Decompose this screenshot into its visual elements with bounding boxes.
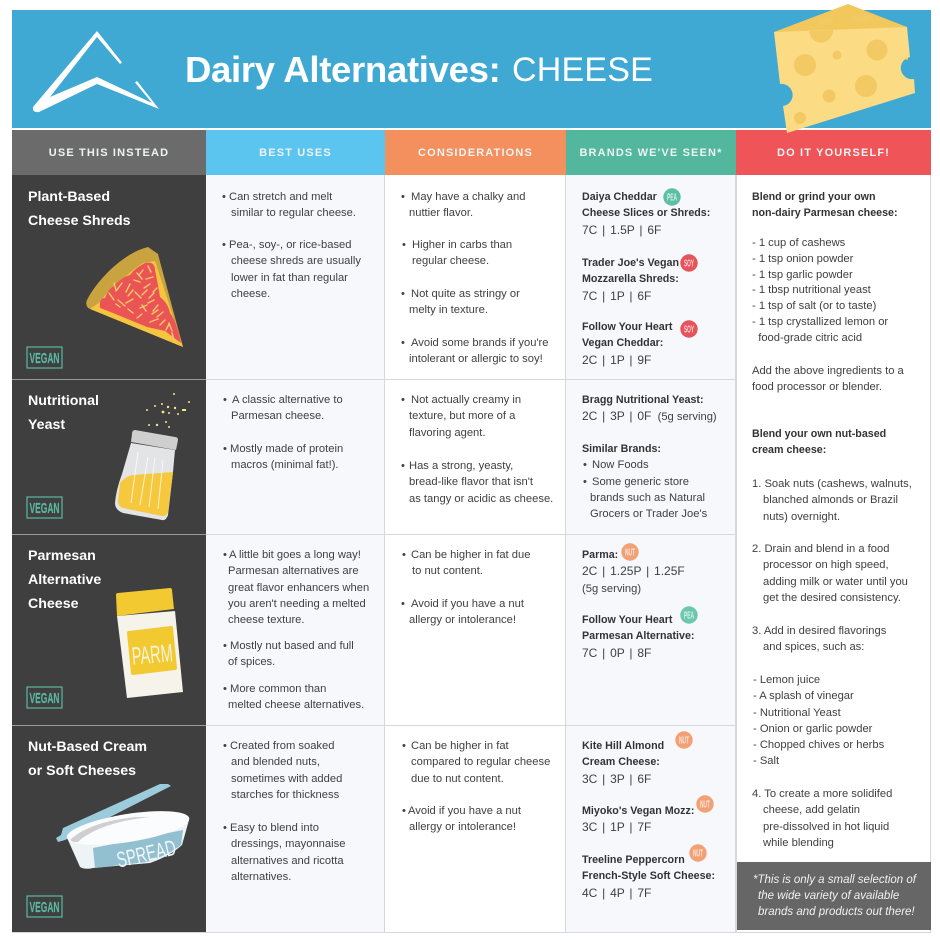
bullet text: due to nut content. [411,773,504,785]
bullet text: cheese shreds are usually [231,255,361,267]
best uses: parmesan: • [223,683,227,695]
badge: nut [696,795,714,813]
brand: miyoko's: 3C | 1P | 7F [582,820,651,834]
bullet text [231,820,345,885]
flavoring list: - Lemon juice [753,674,820,686]
heading: parmesan [28,548,101,612]
badge: nut [621,543,639,561]
brand: kite hill: Cream Cheese: [582,756,660,768]
column header: best uses [206,130,385,175]
brand: parma: 2C | 1.25P | 1.25F [582,564,685,578]
parmesan recipe heading: non-dairy Parmesan cheese: [752,207,898,219]
flavoring list: - Salt [753,755,779,767]
brand: follow your heart: 2C | 1P | 9F [582,353,651,367]
bullet text: melty in texture. [409,304,488,316]
bullet text: Can be higher in fat [411,740,509,752]
bullet text: alternatives. [231,871,291,883]
bullet text: Pea-, soy-, or rice-based [229,239,352,251]
brand: daiya [582,191,710,237]
bullet text: Easy to blend into [230,822,319,834]
heading: plant-based: Cheese Shreds [28,213,131,229]
column header: brands: BRANDS WE'VE SEEN* [579,147,723,159]
bullet text: melted cheese alternatives. [228,699,364,711]
flavoring list [753,672,884,770]
heading: nut-based: Nut-Based Cream [28,739,147,755]
bullet text: Avoid if you have a nut [411,598,524,610]
heading: plant-based: Plant-Based [28,189,110,205]
row: nut-based cream or soft cheeses [12,726,206,933]
bullet text: compared to regular cheese [411,756,550,768]
brand: treeline: 4C | 4P | 7F [582,886,651,900]
vegan badge [26,686,63,709]
brand: follow your heart parmesan: Parmesan Alternative: [582,630,694,642]
parmesan ingredients [752,236,888,347]
brand: daiya: Daiya Cheddar [582,191,657,203]
bullet text: dressings, mayonnaise [231,838,345,850]
brand: parma [582,549,685,595]
title: Dairy Alternatives: [185,49,500,90]
bullet text [401,337,548,365]
step 1 [763,476,912,525]
bullet text: macros (minimal fat!). [231,459,339,471]
brand: parma: Parma: [582,549,618,561]
parmesan ingredients: - 1 tsp crystallized lemon or [752,316,888,328]
step 4: cheese, add gelatin [763,804,860,816]
badge: pea [663,188,681,206]
similar brands list: Now Foods [592,459,649,471]
similar brands list: • [583,476,587,488]
bullet text: Has a strong, yeasty, [409,460,513,472]
parmesan ingredients: food-grade citric acid [758,332,862,344]
icon: parm shaker [116,588,183,698]
heading: parmesan: Parmesan [28,548,96,564]
brands: parmesan [566,535,736,726]
bullet text: Higher in carbs than [412,239,512,251]
brand: follow your heart [582,321,672,367]
bullet text: May have a chalky and [411,191,525,203]
title [185,49,653,90]
bullet text [231,738,342,803]
bullet text [222,239,361,300]
considerations: shreds: • [401,191,405,203]
step 2: processor on high speed, [763,559,889,571]
badge: soy [680,320,698,338]
bullet text: Not actually creamy in [411,394,521,406]
flavoring list: - Onion or garlic powder [753,723,872,735]
bullet text: Parmesan alternatives are [228,565,359,577]
row: nutritional yeast [12,380,206,535]
bullet text [401,598,524,626]
brand: kite hill: Kite Hill Almond [582,740,664,752]
considerations: yeast [385,380,566,535]
bullet text: nuttier flavor. [409,207,473,219]
bullet text: texture, but more of a [409,410,515,422]
brand: bragg: 2C | 3P | 0F (5g serving) [582,409,717,423]
brand: follow your heart: Follow Your Heart [582,321,672,333]
parmesan recipe heading: Blend or grind your own [752,191,876,203]
brand: miyoko's: Miyoko's Vegan Mozz: [582,805,694,817]
similar brands list: Some generic store [592,476,689,488]
parmesan ingredients: - 1 tsp onion powder [752,253,853,265]
bullet text [223,640,354,668]
brand: treeline: French-Style Soft Cheese: [582,870,715,882]
step 4: 4. To create a more solidifed [752,788,892,800]
bullet text: Created from soaked [230,740,334,752]
bullet text: alternatives and ricotta [231,855,344,867]
step 2 [763,541,908,606]
footnote [737,862,931,930]
step 2: 2. Drain and blend in a food [752,543,889,555]
vegan badge [26,895,63,918]
bullet text: allergy or intolerance! [409,821,516,833]
best uses: shreds [206,175,385,380]
icon: cheese wedge [774,4,915,133]
bullet text: flavoring agent. [409,427,486,439]
bullet text: sometimes with added [231,773,342,785]
flavoring list: - A splash of vinegar [753,690,854,702]
bullet text: and blended nuts, [231,756,320,768]
bullet text: you aren't needing a melted [228,598,366,610]
parmesan method [752,363,904,396]
bullet text: Can be higher in fat due [411,549,530,561]
bullet text [223,394,343,422]
footnote: *This is only a small selection of [753,874,916,886]
considerations: shreds [385,175,566,380]
bullet text: A classic alternative to [232,394,343,406]
badge: nut [675,731,693,749]
heading: parmesan: Cheese [28,596,78,612]
heading: nutritional yeast: Nutritional [28,393,99,409]
bullet text [401,288,520,316]
considerations: shreds: • [401,337,405,349]
parmesan method: food processor or blender. [752,381,882,393]
flavoring list: - Chopped chives or herbs [753,739,884,751]
brand: bragg [582,394,717,423]
bullet text: regular cheese. [412,255,489,267]
column header: use this instead: USE THIS INSTEAD [49,147,169,159]
brand: follow your heart parmesan: Follow Your Heart [582,614,672,626]
best uses: yeast [206,380,385,535]
brand: daiya: Cheese Slices or Shreds: [582,207,710,219]
column header: do it yourself: DO IT YOURSELF! [777,147,890,159]
brand: bragg: Bragg Nutritional Yeast: [582,394,704,406]
brand: follow your heart: Vegan Cheddar: [582,337,663,349]
best uses: nut-based: • [223,822,227,834]
bullet text [409,803,521,836]
similar brands list: Grocers or Trader Joe's [590,508,707,520]
best uses: nut-based [206,726,385,933]
brand: follow your heart parmesan [582,614,694,660]
step 1: nuts) overnight. [763,511,840,523]
brand: trader joe's: 7C | 1P | 6F [582,289,651,303]
brand: treeline [582,852,715,902]
bullet text: Can stretch and melt [229,191,332,203]
step 1: 1. Soak nuts (cashews, walnuts, [752,478,912,490]
bullet text: similar to regular cheese. [231,207,356,219]
bullet text: to nut content. [412,565,483,577]
bullet text: lower in fat than regular [231,272,348,284]
header banner [12,10,931,128]
row: parmesan alternative cheese [12,535,206,726]
bullet text [401,460,553,505]
step 3 [763,623,886,656]
similar brands list: brands such as Natural [590,492,705,504]
step 2: adding milk or water until you [763,576,908,588]
best uses: parmesan: • [223,549,227,561]
heading: nutritional yeast: Yeast [28,417,65,433]
cream cheese heading: cream cheese: [752,444,826,456]
brands: shreds [566,175,736,380]
bullet text: Mostly made of protein [230,443,343,455]
brands: nut-based [566,726,736,933]
brand: parma: (5g serving) [582,583,641,595]
bullet text: of spices. [228,656,275,668]
step 4 [763,786,892,851]
best uses: nut-based: • [223,740,227,752]
considerations: parmesan [385,535,566,726]
bullet text: bread-like flavor that isn't [409,476,533,488]
parmesan ingredients: - 1 tsp garlic powder [752,269,853,281]
parmesan ingredients: - 1 cup of cashews [752,237,845,249]
bullet text: More common than [230,683,326,695]
bullet text [402,239,512,267]
bullet text: Mostly nut based and full [230,640,354,652]
icon: pizza slice [86,247,183,347]
bullet text [223,683,364,711]
icon: yeast shaker [115,393,190,520]
badge: nut [689,844,707,862]
brand: kite hill [582,738,664,788]
considerations: parmesan: • [402,549,406,561]
considerations: yeast: • [401,394,405,406]
column header: considerations [385,130,566,175]
column header: use this instead [12,130,206,175]
considerations: shreds: • [402,239,406,251]
best uses: yeast: • [223,443,227,455]
bullet text: starches for thickness [231,789,339,801]
title: CHEESE [512,51,653,89]
brand: trader joe's: Mozzarella Shreds: [582,273,679,285]
similar brands list [582,443,707,520]
column header: do it yourself [736,130,931,175]
footnote: brands and products out there! [758,906,915,918]
brand: kite hill: 3C | 3P | 6F [582,772,651,786]
bullet text: Avoid if you have a nut [408,805,521,817]
brands: yeast [566,380,736,535]
bullet text [401,394,521,439]
heading: nut-based [28,739,147,779]
bullet text: as tangy or acidic as cheese. [409,493,553,505]
footnote: the wide variety of available [758,890,899,902]
considerations: parmesan: • [401,598,405,610]
icon: mountain logo [32,31,159,112]
bullet text [411,738,550,787]
bullet text: Avoid some brands if you're [411,337,548,349]
brand: miyoko's [582,803,694,837]
row: plant-based cheese shreds [12,175,206,380]
parmesan ingredients: - 1 tsp of salt (or to taste) [752,300,876,312]
bullet text: intolerant or allergic to soy! [409,353,543,365]
bullet text [223,443,343,471]
bullet text: cheese. [231,288,270,300]
vegan badge [26,346,63,369]
bullet text [223,549,369,626]
best uses: parmesan: • [223,640,227,652]
cream cheese heading: Blend your own nut-based [752,428,886,440]
bullet text: Not quite as stringy or [411,288,520,300]
bullet text [401,191,525,219]
step 3: 3. Add in desired flavorings [752,625,886,637]
cream cheese heading [752,426,886,459]
step 4: while blending [763,837,834,849]
brand: treeline: Treeline Peppercorn [582,854,685,866]
heading: parmesan: Alternative [28,572,101,588]
vegan badge [26,496,63,519]
heading: plant-based [28,189,131,229]
bullet text: A little bit goes a long way! [229,549,361,561]
bullet text: Parmesan cheese. [231,410,324,422]
flavoring list: - Nutritional Yeast [753,707,841,719]
bullet text [222,191,356,219]
parmesan ingredients: - 1 tbsp nutritional yeast [752,284,871,296]
bullet text: cheese texture. [228,614,304,626]
parmesan method: Add the above ingredients to a [752,365,904,377]
considerations: shreds: • [401,288,405,300]
considerations: nut-based: • [402,805,406,817]
considerations: nut-based: • [402,740,406,752]
step 1: blanched almonds or Brazil [763,494,898,506]
step 4: pre-dissolved in hot liquid [763,821,889,833]
brand: trader joe's: Trader Joe's Vegan [582,257,679,269]
column header: brands [566,130,736,175]
brand: follow your heart parmesan: 7C | 0P | 8F [582,646,651,660]
icon: spread tub [54,781,204,876]
badge: pea [680,606,698,624]
bullet text [402,549,530,577]
best uses: shreds: • [222,239,226,251]
considerations: yeast: • [401,460,405,472]
step 2: get the desired consistency. [763,592,901,604]
best uses: yeast: • [223,394,227,406]
column header: best uses: BEST USES [259,147,332,159]
heading: nutritional yeast [28,393,99,433]
badge: soy [680,254,698,272]
similar brands list: Similar Brands: [582,443,661,455]
step 3: and spices, such as: [763,641,864,653]
brand: trader joe's [582,257,679,303]
bullet text: great flavor enhancers when [228,582,369,594]
parmesan recipe heading [752,189,898,222]
brand: daiya: 7C | 1.5P | 6F [582,223,661,237]
similar brands list: • [583,459,587,471]
best uses: parmesan [206,535,385,726]
column header: considerations: CONSIDERATIONS [418,147,533,159]
best uses: shreds: • [222,191,226,203]
heading: nut-based: or Soft Cheeses [28,763,136,779]
panel: do it yourself [736,175,931,933]
considerations: nut-based [385,726,566,933]
bullet text: allergy or intolerance! [409,614,516,626]
